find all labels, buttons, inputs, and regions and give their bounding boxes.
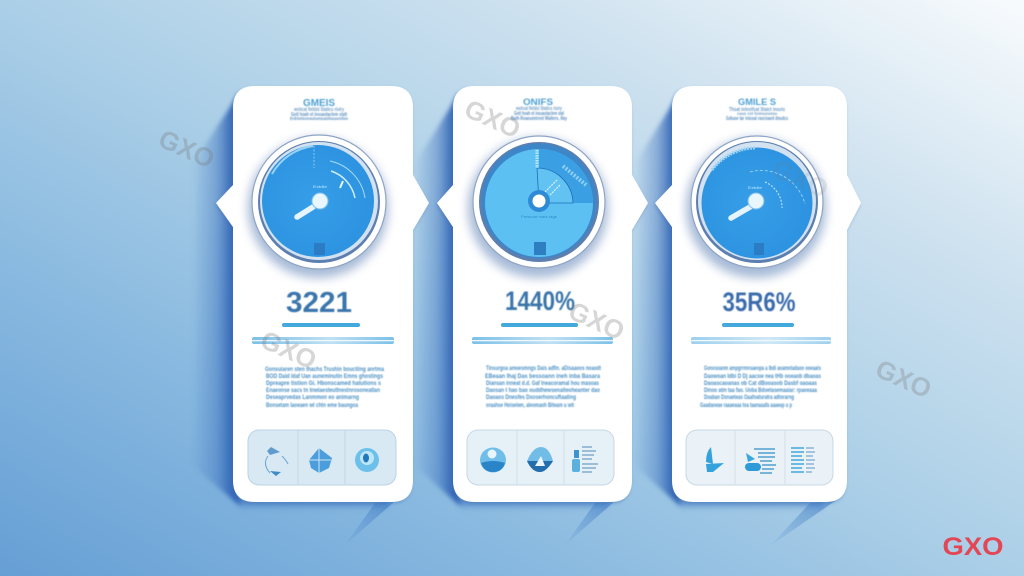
card 2 description: Diansan inneat d.d. Gaf lneacoramal hou masoas bbox=[486, 380, 599, 387]
card 2 value bar bbox=[501, 323, 578, 327]
card 1 heading: wshcal fieldst Statics risiry bbox=[293, 107, 344, 113]
card 1 heading: Erdrimtionnoutsemsatsheasurnlion bbox=[290, 116, 348, 121]
card 2 body bbox=[437, 86, 648, 502]
watermarks: GXO bbox=[871, 353, 936, 404]
card 2 description: EBeaan Ihaj Das bessoann ineh inba Basara bbox=[485, 373, 600, 380]
card 3 description: Daowoan Idbi D Dj aacsw nea tHb ooeaob dbaoas bbox=[704, 373, 821, 380]
card 1 description: Bonsetam laoeaen wt chtn eme baungoa bbox=[266, 402, 358, 409]
card 2 heading: Bath Roaoumtrent Walters. Ifay bbox=[511, 116, 567, 122]
card 3 gauge bbox=[686, 136, 826, 278]
card 2 description: oraahse Hoiseiwn, aleomaoh Biteam u wit bbox=[486, 402, 575, 409]
icon: water drop sun bbox=[480, 448, 506, 472]
watermarks: GXO bbox=[256, 324, 321, 375]
card 2 gauge: Pressure mark rage bbox=[521, 214, 558, 219]
card 3 value: 35R6% bbox=[722, 287, 796, 317]
card 2 heading: ONIFS bbox=[523, 97, 553, 108]
card 2 gauge bbox=[468, 136, 608, 278]
card 3 heading: GMILE S bbox=[738, 97, 776, 108]
card 2 description: Tinsurgoa amoesmngs Dais adfin. aDisaaoos noaodt bbox=[486, 365, 602, 372]
card 1 heading bbox=[290, 98, 348, 121]
card 1 value: 3221 bbox=[286, 287, 352, 319]
long shadows bbox=[192, 92, 835, 546]
panel: card 1 bbox=[216, 86, 429, 502]
watermarks: GXO bbox=[564, 295, 629, 346]
card 3 heading: caus cot hoinuoseoa bbox=[737, 111, 777, 116]
card 2 description bbox=[485, 365, 602, 409]
icon: ship outline bbox=[265, 447, 288, 476]
card 2 divider bars bbox=[472, 337, 613, 344]
card 3 gauge: Extdle bbox=[748, 185, 763, 190]
card 3 divider bars bbox=[691, 337, 831, 344]
card 1 value bar bbox=[282, 323, 360, 327]
card 1 description: Enaeonse sacs tn Inwiaesteutlnestnrosoneatlan bbox=[266, 387, 380, 394]
card 3 description: Gonosoanm ampgrrmnsaeopa a Ibdi aoamotadaoo ooeaats bbox=[704, 365, 821, 372]
icon: leaf check bbox=[706, 447, 724, 472]
card 2 description: Daoaos Dnesfes Dxoserhoncuftaating bbox=[486, 394, 576, 401]
card 3 heading bbox=[726, 97, 788, 122]
watermarks: GXO bbox=[768, 153, 833, 204]
card 3 heading: Thsat inlestfcat Staict insuts bbox=[729, 107, 785, 113]
card 1 heading: GMEIS bbox=[303, 98, 335, 109]
card 2 icon strip bbox=[467, 430, 614, 485]
card 2 description: Daosan t hao bao ouddhewsenaiteoheanter dao bbox=[486, 387, 600, 394]
card 2 heading: wshcal fieldst Statics risiry bbox=[515, 106, 562, 112]
card 2 heading bbox=[511, 97, 567, 122]
card 1 divider bars bbox=[252, 337, 394, 344]
card 1 description: Dpreapre tistion Gi. Hbonscamed hatutions s bbox=[266, 380, 381, 387]
card 1 description bbox=[265, 366, 384, 409]
card 3 heading: Gdiuoe tar iniosal raxcioard dnsdcs bbox=[726, 116, 788, 122]
card 2 value: 1440% bbox=[505, 286, 575, 316]
card 3 description: Doaban Dsnaeteas Oaafoaturatra adtorarng bbox=[704, 394, 794, 401]
panel: card 2 bbox=[437, 86, 648, 502]
card 1 body bbox=[216, 86, 429, 502]
card 3 description: Daoascaoanas ob Cat dBooasob Dasbf oaoaas bbox=[704, 380, 817, 387]
card 1 gauge bbox=[248, 135, 388, 278]
card 3 description: Gaadaoeae raaaeaaa toa taanaaafa aaaeap u p bbox=[700, 402, 792, 409]
icon: bottle and list bbox=[572, 447, 598, 472]
card 1 heading: Gott hoah ot insuaxtaclem stalt bbox=[291, 112, 347, 118]
icon: cube cloud bbox=[309, 448, 332, 473]
panel: card 3 bbox=[655, 86, 861, 502]
watermarks: GXO bbox=[154, 123, 219, 174]
watermarks: GXO bbox=[460, 93, 525, 144]
card 1 icon strip bbox=[248, 430, 396, 485]
card 3 body bbox=[655, 86, 861, 502]
card 1 description: Gonsuiaren sten thachs Trushin bouctiing anrtma bbox=[265, 366, 384, 373]
card 3 description bbox=[700, 365, 821, 409]
card 3 icon strip bbox=[686, 430, 833, 485]
card 1 description: Deseaprvedas Lanmmon eo animarng bbox=[266, 394, 359, 401]
icon: bars with cloud bbox=[745, 449, 776, 473]
icon: data table bbox=[791, 448, 815, 472]
icon: eye bbox=[355, 448, 379, 472]
icon: lake bbox=[527, 447, 553, 472]
card 3 value bar bbox=[722, 323, 794, 327]
brand mark: GXO bbox=[942, 533, 1004, 561]
card 1 gauge: Extdle bbox=[313, 184, 328, 189]
card 1 description: BOD Daid Idaf Uan auneminutin Emns ghostings bbox=[266, 373, 383, 380]
watermarks bbox=[154, 93, 936, 404]
card 2 heading: Gott hoah ot insuaxtaclem stal bbox=[514, 111, 564, 117]
card 3 description: Dinoo atm taa fao. Uoba Bdoetasemaaiar: rpaoeaaa bbox=[704, 387, 817, 394]
